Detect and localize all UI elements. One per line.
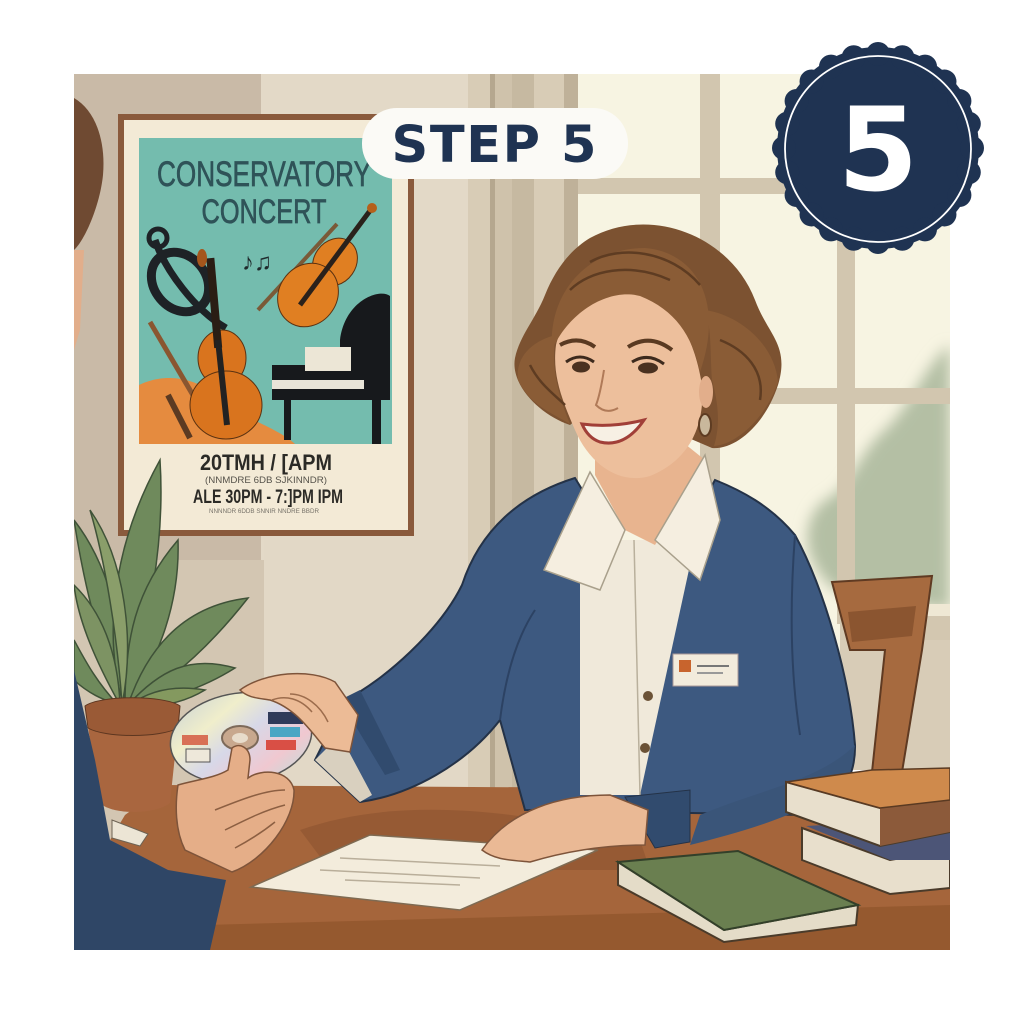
name badge [673,654,738,686]
left person sleeve [74,670,226,950]
green book [618,851,858,942]
small paper on table [112,820,148,846]
buttons [640,691,653,753]
poster: (NNMDRE 6DB SJKINNDR) [205,475,327,485]
window [578,74,950,770]
woman hair strands [530,253,761,405]
poster violin right [258,203,377,339]
book stack [786,768,950,894]
woman features [560,340,713,443]
document [251,835,598,910]
window curtain trim [468,74,578,834]
table [110,785,950,950]
person left hair [74,98,103,250]
woman hand holding CD [240,674,358,752]
woman face [555,292,702,478]
chair [832,576,932,772]
poster: CONCERT [202,193,326,231]
poster text: 20TMH / [APM [200,450,332,475]
CD [170,692,312,779]
step label: STEP 5 [392,116,596,175]
shirt [544,440,720,795]
number badge [777,47,979,249]
illustration scene [74,74,950,950]
poster piano [272,294,390,444]
plant [74,460,248,812]
poster [118,114,414,536]
poster: NNNNDR 6DDB SNNIR NNDRE BBDR [209,509,320,515]
woman hair back [514,224,781,448]
other person hand [176,746,294,872]
poster: ALE 30PM - 7:]PM IPM [193,487,343,508]
poster notes: ♪♫ [242,249,272,276]
number badge: 5 [838,83,918,218]
wall [74,74,468,842]
cardigan [315,478,855,845]
step label [362,108,628,179]
woman hair front [518,248,778,446]
neck [595,440,705,545]
poster title: CONSERVATORY [157,155,371,194]
hand on table [482,795,648,862]
poster horn [140,229,226,328]
cuff right [625,790,690,848]
poster violin left [150,249,262,439]
